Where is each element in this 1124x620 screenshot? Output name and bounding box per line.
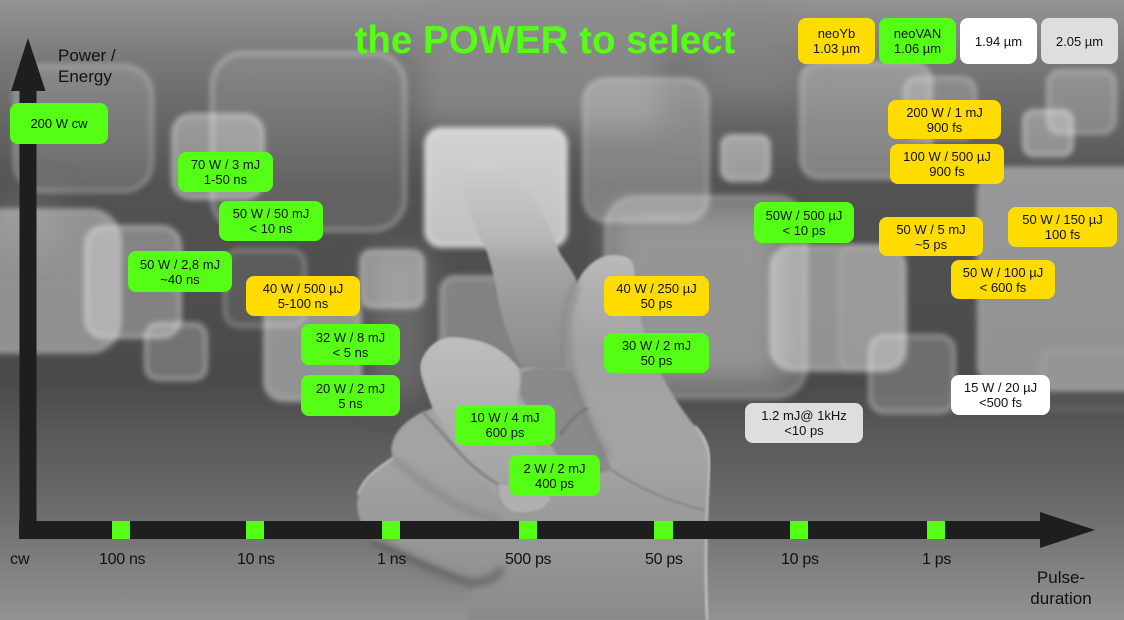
legend: neoYb bbox=[798, 18, 875, 64]
data label: 200 W / 1 mJ bbox=[888, 100, 1001, 139]
legend: 1.94 µm bbox=[960, 18, 1037, 64]
tick label: 10 ps: 10 ps bbox=[781, 551, 819, 568]
legend: 1.94 µm: 1.94 µm bbox=[975, 34, 1022, 48]
data label: 50 W / 100 µJ: < 600 fs bbox=[980, 280, 1026, 294]
data label: 15 W / 20 µJ: 15 W / 20 µJ bbox=[964, 380, 1037, 395]
data label: 10 W / 4 mJ: 600 ps bbox=[485, 425, 525, 440]
data label: 200 W cw bbox=[10, 103, 108, 144]
data label: 200 W / 1 mJ: 200 W / 1 mJ bbox=[906, 104, 983, 120]
gap shading between fingers bbox=[520, 368, 612, 480]
data label: 100 W / 500 µJ: 900 fs bbox=[929, 164, 965, 179]
curled finger bbox=[421, 337, 552, 512]
y axis arrow bbox=[11, 38, 46, 521]
data label: 40 W / 250 µJ: 50 ps bbox=[641, 296, 672, 311]
data label: 50 W / 50 mJ: < 10 ns bbox=[249, 221, 292, 236]
data label: 30 W / 2 mJ bbox=[604, 333, 709, 373]
y axis label bbox=[58, 46, 116, 86]
tick label: 1 ps: 1 ps bbox=[922, 551, 951, 568]
legend: neoVAN bbox=[879, 18, 956, 64]
data label: 50 W / 150 µJ: 100 fs bbox=[1045, 227, 1080, 242]
data label: 50 W / 150 µJ bbox=[1008, 207, 1117, 247]
legend: neoVAN: 1.06 µm bbox=[894, 41, 941, 56]
data label: 40 W / 500 µJ: 40 W / 500 µJ bbox=[263, 281, 343, 296]
data label: 1.2 mJ @ 1 kHz bbox=[745, 403, 863, 443]
palm and thumb side bbox=[357, 255, 709, 620]
legend: 2.05 µm: 2.05 µm bbox=[1056, 34, 1103, 48]
y axis label: Energy bbox=[58, 67, 112, 86]
data label: 32 W / 8 mJ: 32 W / 8 mJ bbox=[316, 330, 385, 344]
index finger bbox=[462, 157, 582, 372]
data label: 50 W / 50 mJ: 50 W / 50 mJ bbox=[233, 206, 309, 221]
data label: 20 W / 2 mJ: 20 W / 2 mJ bbox=[316, 380, 385, 396]
data label: 50W / 500 µJ: 50W / 500 µJ bbox=[766, 208, 842, 222]
data label: 70 W / 3 mJ: 70 W / 3 mJ bbox=[191, 157, 260, 172]
data label: 20 W / 2 mJ bbox=[301, 375, 400, 416]
x axis arrow with tick marks bbox=[19, 512, 1095, 548]
data label: 50 W / 100 µJ: 50 W / 100 µJ bbox=[963, 264, 1043, 280]
data label: 15 W / 20 µJ: <500 fs bbox=[979, 395, 1022, 410]
fingernail bbox=[498, 484, 552, 513]
data label: 40 W / 250 µJ bbox=[604, 276, 709, 316]
data label: 40 W / 500 µJ bbox=[246, 276, 360, 316]
tick label: 100 ns: 100 ns bbox=[99, 551, 145, 568]
legend: 2.05 µm bbox=[1041, 18, 1118, 64]
hand creases and shadows bbox=[358, 283, 710, 620]
data label: 32 W / 8 mJ: < 5 ns bbox=[333, 344, 368, 360]
tick label: 500 ps: 500 ps bbox=[505, 551, 551, 568]
x axis label bbox=[1030, 568, 1092, 608]
data label: 50 W / 5 mJ: 50 W / 5 mJ bbox=[896, 222, 966, 236]
data label: 50 W / 100 µJ bbox=[951, 260, 1055, 299]
data label: 50 W / 2,8 mJ: ~40 ns bbox=[160, 272, 200, 286]
data label: 50 W / 5 mJ bbox=[879, 217, 983, 256]
data label: 1.2 mJ @ 1 kHz: 1.2 mJ@ 1kHz bbox=[761, 408, 847, 423]
data label: 30 W / 2 mJ: 30 W / 2 mJ bbox=[622, 338, 691, 353]
data label: 2 W / 2 mJ: 400 ps bbox=[535, 476, 574, 490]
data label: 15 W / 20 µJ bbox=[951, 375, 1050, 415]
data label: 70 W / 3 mJ: 1-50 ns bbox=[204, 172, 247, 187]
data label: 1.2 mJ @ 1 kHz: <10 ps bbox=[784, 423, 824, 438]
title: the POWER to select bbox=[355, 19, 735, 62]
data label: 2 W / 2 mJ bbox=[509, 455, 600, 496]
y axis label: Power / bbox=[58, 46, 116, 65]
data label: 50W / 500 µJ: < 10 ps bbox=[782, 222, 826, 238]
data label: 70 W / 3 mJ bbox=[178, 152, 273, 192]
legend: neoVAN: neoVAN bbox=[894, 26, 941, 41]
x axis label: duration bbox=[1030, 589, 1092, 608]
data label: 50W / 500 µJ bbox=[754, 202, 854, 243]
data label: 40 W / 500 µJ: 5-100 ns bbox=[278, 296, 328, 311]
data label: 100 W / 500 µJ: 100 W / 500 µJ bbox=[903, 149, 991, 164]
data label: 50 W / 2,8 mJ: 50 W / 2,8 mJ bbox=[140, 256, 220, 272]
legend: neoYb: 1.03 µm bbox=[813, 41, 860, 56]
x axis label: Pulse- bbox=[1037, 568, 1085, 587]
data label: 50 W / 150 µJ: 50 W / 150 µJ bbox=[1022, 212, 1103, 227]
hand bbox=[357, 157, 710, 620]
data label: 30 W / 2 mJ: 50 ps bbox=[641, 353, 672, 368]
tick label: 10 ns: 10 ns bbox=[237, 551, 275, 568]
data label: 200 W / 1 mJ: 900 fs bbox=[927, 120, 962, 134]
legend: neoYb: neoYb bbox=[818, 26, 855, 41]
data label: 10 W / 4 mJ: 10 W / 4 mJ bbox=[470, 410, 540, 425]
data label: 50 W / 2,8 mJ bbox=[128, 251, 232, 292]
data label: 40 W / 250 µJ: 40 W / 250 µJ bbox=[616, 281, 697, 296]
data label: 50 W / 5 mJ: ~5 ps bbox=[915, 236, 947, 252]
data label: 10 W / 4 mJ bbox=[455, 405, 555, 445]
tick label: cw: cw bbox=[10, 551, 30, 568]
tick label: 50 ps: 50 ps bbox=[645, 551, 683, 568]
data label: 20 W / 2 mJ: 5 ns bbox=[338, 396, 363, 410]
data label: 200 W cw: 200 W cw bbox=[30, 116, 88, 131]
tick label: 1 ns: 1 ns bbox=[377, 551, 406, 568]
data label: 100 W / 500 µJ bbox=[890, 144, 1004, 184]
data label: 50 W / 50 mJ bbox=[219, 201, 323, 241]
data label: 2 W / 2 mJ: 2 W / 2 mJ bbox=[523, 460, 586, 476]
data label: 32 W / 8 mJ bbox=[301, 324, 400, 365]
